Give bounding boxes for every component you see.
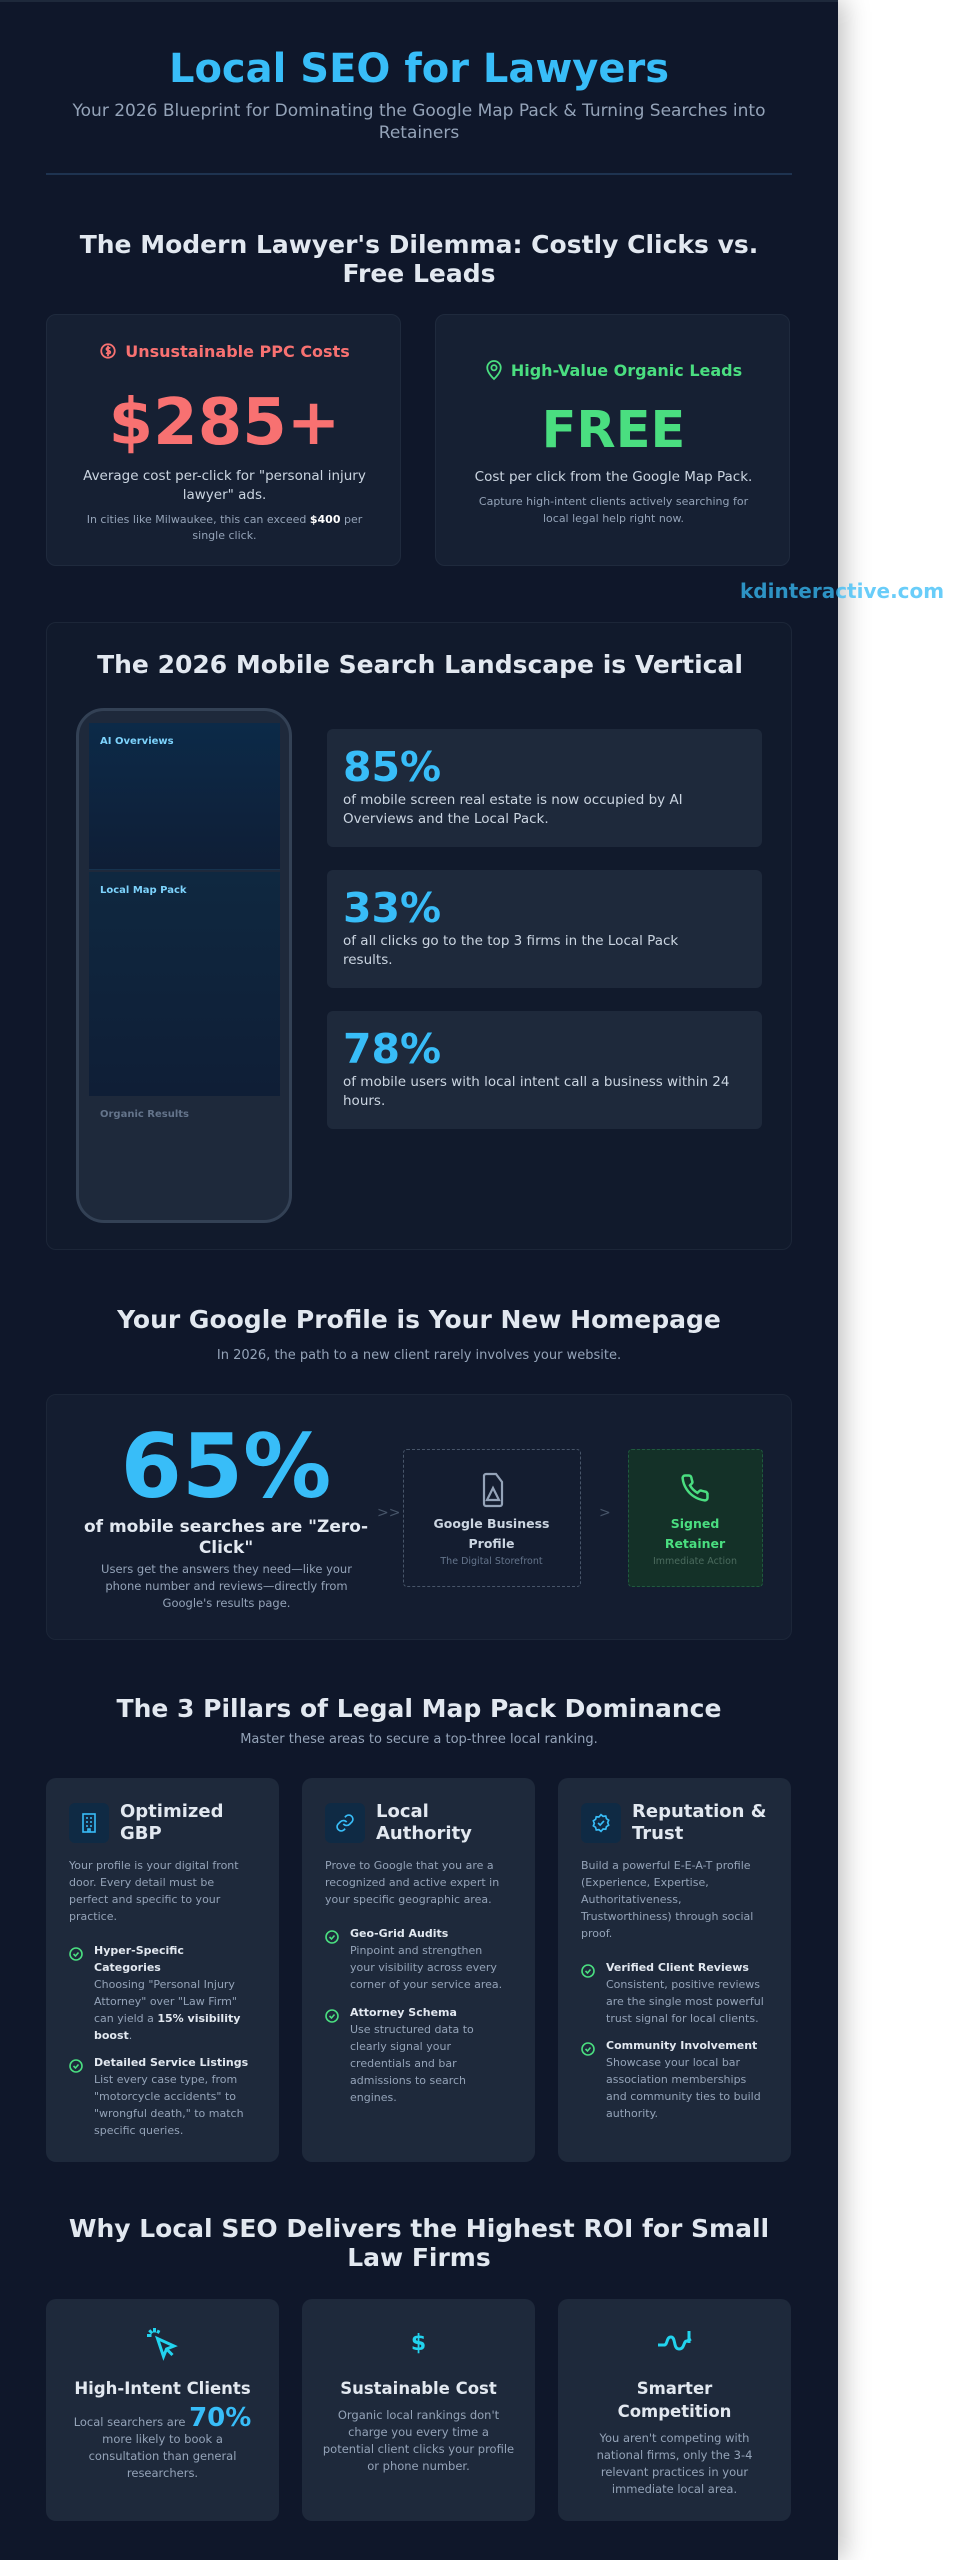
- ROI card: sustainable cost: charge you every time a: [348, 2425, 489, 2439]
- stat 78%: [327, 1011, 762, 1129]
- icon: badge: [581, 1803, 621, 1843]
- stat 78%: 78%: [343, 1025, 441, 1073]
- AI overviews block: AI Overviews: [100, 736, 174, 747]
- ROI card: competition: Smarter: [637, 2379, 712, 2398]
- item: categories: Categories: [94, 1961, 161, 1974]
- arrow single: >: [599, 1505, 611, 1521]
- flow box: GBP: The Digital Storefront: [440, 1556, 543, 1567]
- subheading: In 2026, the path to a new client rarely involves your website.: [217, 1348, 621, 1363]
- big stat 65%: 65%: [121, 1415, 331, 1518]
- heading: pillars: The 3 Pillars of Legal Map Pack Dominance: [117, 1694, 721, 1723]
- panel: zero-click: [46, 1394, 792, 1640]
- item: geo-grid: [325, 1927, 502, 1991]
- ROI card: high-intent: more likely to book a: [102, 2432, 223, 2446]
- stat 33%: of all clicks go to the top 3 firms in the Local Pack: [343, 933, 678, 949]
- item: categories: Choosing "Personal Injury Attorney" over "Law Firm" can yield a 15% visibility boost.: [94, 1978, 240, 2042]
- pillar: optimized GBP: Your profile is your digital front door. Every detail must be perfect and specific to your practice.: [69, 1859, 239, 1923]
- ROI card: high-intent: Local searchers are 70%: [74, 2403, 251, 2433]
- phone mockup: [76, 708, 292, 1223]
- ROI card: sustainable cost: [302, 2299, 535, 2521]
- stat 78%: of mobile users with local intent call a business within 24: [343, 1074, 729, 1090]
- pillar: reputation: Trust: [632, 1823, 683, 1844]
- pillar: local authority: Local Authority: [376, 1801, 472, 1844]
- item: listings: List every case type, from "motorcycle accidents" to "wrongful death," to match specific queries.: [94, 2073, 244, 2137]
- item: schema: Use structured data to clearly signal your credentials and bar admissions to search engines.: [350, 2023, 474, 2104]
- subtitle: Your 2026 Blueprint for Dominating the Google Map Pack & Turning Searches into Retainers: [73, 101, 765, 143]
- icon: squiggle: [658, 2331, 692, 2350]
- icon: storefront: [482, 1472, 504, 1508]
- icon: phone: [681, 1474, 709, 1502]
- ROI card: high-intent: consultation than general: [89, 2449, 236, 2463]
- pillar: optimized GBP: Optimized GBP: [120, 1801, 223, 1844]
- subheading: pillars: Master these areas to secure a top-three local ranking.: [240, 1732, 598, 1747]
- item: reviews: [581, 1961, 764, 2025]
- ROI card: competition: You aren't competing with: [600, 2431, 749, 2445]
- item: categories: [69, 1944, 240, 2042]
- local map pack block: [89, 872, 280, 1096]
- item: community: Showcase your local bar association memberships and community ties to build authority.: [606, 2056, 761, 2120]
- ROI card: competition: Competition: [618, 2402, 731, 2421]
- flow box: retainer: Retainer: [665, 1536, 725, 1551]
- pillar: reputation: [558, 1778, 791, 2162]
- flow box: retainer: Immediate Action: [653, 1556, 737, 1567]
- stat 33%: results.: [343, 952, 393, 968]
- note: Capture high-intent clients actively searching for local legal help right now.: [479, 495, 748, 525]
- flow box: GBP: [403, 1449, 581, 1587]
- watermark: kdinteractive.com: [740, 579, 944, 603]
- item: geo-grid: your visibility across every corner of your service area.: [350, 1961, 502, 1991]
- stat 85%: of mobile screen real estate is now occupied by AI: [343, 792, 683, 808]
- stat 85%: [327, 729, 762, 847]
- stat 85%: 85%: [343, 743, 441, 791]
- ROI card: sustainable cost: Sustainable Cost: [340, 2379, 497, 2398]
- ROI card: competition: relevant practices in your: [601, 2465, 748, 2479]
- panel: PPC costs: [46, 314, 401, 566]
- ROI card: sustainable cost: potential client clicks your profile: [323, 2442, 514, 2456]
- flow box: retainer: Signed: [671, 1516, 719, 1531]
- card header: organic: High-Value Organic Leads: [511, 361, 742, 380]
- ROI card: sustainable cost: Organic local rankings don't: [338, 2408, 499, 2422]
- card header: PPC: Unsustainable PPC Costs: [125, 342, 350, 361]
- zero-click note: Users get the answers they need—like your phone number and reviews—directly from Google's results page.: [101, 1562, 352, 1610]
- ROI card: competition: [558, 2299, 791, 2521]
- ROI card: high-intent: High-Intent Clients: [74, 2379, 251, 2398]
- heading: dilemma: The Modern Lawyer's Dilemma: Costly Clicks vs. Free Leads: [80, 230, 758, 288]
- item: reviews: Verified Client Reviews: [606, 1961, 749, 1974]
- item: listings: [69, 2056, 248, 2137]
- title: Local SEO for Lawyers: [169, 46, 669, 92]
- pillar: reputation: Build a powerful E-E-A-T profile (Experience, Expertise, Authoritativeness, Trustworthiness) through social proof.: [581, 1859, 753, 1940]
- item: schema: Attorney Schema: [350, 2006, 457, 2019]
- item: categories: Hyper-Specific: [94, 1944, 184, 1957]
- panel: mobile landscape: [46, 622, 792, 1250]
- ROI card: high-intent: researchers.: [127, 2466, 198, 2480]
- AI overviews block: [89, 723, 280, 870]
- stat 78%: hours.: [343, 1093, 385, 1109]
- description: Cost per click from the Google Map Pack.: [475, 469, 752, 485]
- item: geo-grid: Pinpoint and strengthen: [350, 1944, 482, 1957]
- big number: $285+: [109, 386, 340, 460]
- stat 33%: 33%: [343, 884, 441, 932]
- heading: google profile: Your Google Profile is Your New Homepage: [117, 1305, 721, 1334]
- item: reviews: Consistent, positive reviews are the single most powerful trust signal for local clients.: [606, 1978, 764, 2025]
- icon: dollar: $: [411, 2331, 426, 2356]
- item: geo-grid: Geo-Grid Audits: [350, 1927, 448, 1940]
- icon: link: [325, 1803, 365, 1843]
- arrow double: >>: [377, 1505, 400, 1521]
- zero-click label: of mobile searches are "Zero-Click": [84, 1517, 368, 1558]
- panel: organic leads: [435, 314, 790, 566]
- pillar: optimized GBP: [46, 1778, 279, 2162]
- note: In cities like Milwaukee, this can exceed $400 per single click.: [87, 513, 362, 542]
- ROI card: sustainable cost: or phone number.: [367, 2459, 470, 2473]
- icon: cursor click: [147, 2328, 178, 2361]
- heading: ROI: Why Local SEO Delivers the Highest ROI for Small Law Firms: [69, 2214, 769, 2272]
- item: community: Community Involvement: [606, 2039, 757, 2052]
- organic label: Organic Results: [100, 1109, 189, 1120]
- ROI card: competition: immediate local area.: [612, 2482, 737, 2496]
- pillar: reputation: Reputation &: [632, 1801, 766, 1822]
- ROI card: high-intent: [46, 2299, 279, 2521]
- big word FREE: FREE: [542, 401, 685, 460]
- flow box: GBP: Google Business: [434, 1516, 549, 1531]
- stat 85%: Overviews and the Local Pack.: [343, 811, 549, 827]
- pillar: local authority: [302, 1778, 535, 2162]
- flow box: GBP: Profile: [469, 1536, 514, 1551]
- item: listings: Detailed Service Listings: [94, 2056, 248, 2069]
- pillar: local authority: Prove to Google that you are a recognized and active expert in your specific geographic area.: [325, 1859, 499, 1906]
- description: Average cost per-click for "personal injury lawyer" ads.: [83, 468, 366, 503]
- flow box: retainer: [628, 1449, 763, 1587]
- item: community: [581, 2039, 761, 2120]
- ROI card: competition: national firms, only the 3-4: [597, 2448, 752, 2462]
- heading: mobile: The 2026 Mobile Search Landscape is Vertical: [97, 650, 743, 679]
- item: schema: [325, 2006, 474, 2104]
- icon: building: [69, 1803, 109, 1843]
- local map pack block: Local Map Pack: [100, 885, 187, 896]
- stat 33%: [327, 870, 762, 988]
